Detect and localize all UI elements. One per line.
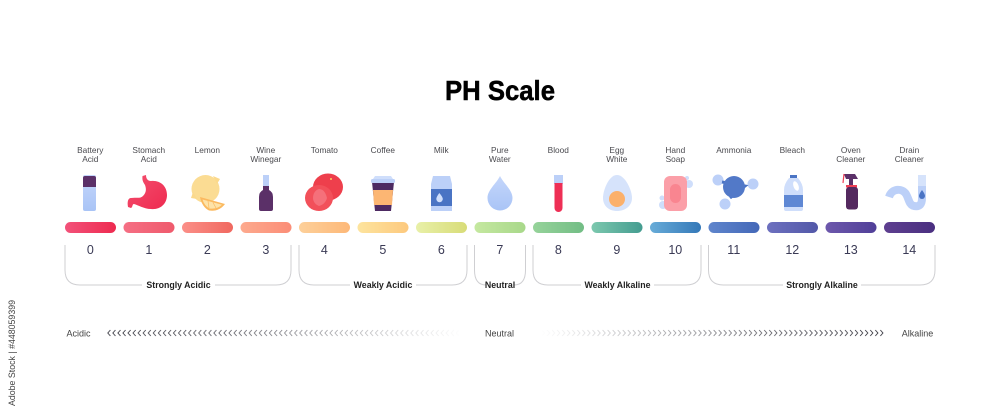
icon: water drop [488, 176, 512, 210]
substance labels: Milk [434, 145, 450, 155]
bracket: weakly acidic: Weakly Acidic [354, 280, 412, 290]
icon: hand soap [659, 176, 693, 211]
arrow: towards acidic [107, 330, 448, 336]
pH numbers: 7 [496, 243, 503, 257]
substance labels: Pure [491, 145, 509, 155]
bracket: neutral [474, 245, 526, 290]
bracket: strongly acidic: Strongly Acidic [146, 280, 211, 290]
substance labels: Ammonia [716, 145, 752, 155]
substance labels: Stomach [132, 145, 166, 155]
pH numbers: 2 [204, 243, 211, 257]
pH numbers: 5 [379, 243, 386, 257]
substance labels: Blood [548, 145, 569, 155]
substance labels [77, 145, 924, 164]
pH numbers: 11 [727, 243, 740, 257]
icon: egg [603, 175, 632, 211]
pH numbers [87, 243, 916, 257]
stock image credit: Adobe Stock | #448059399 [7, 300, 17, 406]
substance labels: Drain [899, 145, 920, 155]
bracket: weakly acidic [299, 245, 467, 290]
pH numbers: 3 [262, 243, 269, 257]
pH numbers: 0 [87, 243, 94, 257]
pH numbers: 6 [438, 243, 445, 257]
pH numbers: 9 [613, 243, 620, 257]
icon: stomach [128, 175, 167, 209]
icon: bleach bottle [784, 175, 803, 211]
pH numbers: 4 [321, 243, 328, 257]
pH numbers: 12 [785, 243, 799, 257]
icon: tomato [305, 174, 343, 211]
substance labels: Bleach [780, 145, 805, 155]
title: PH Scale [445, 75, 555, 106]
icon: milk carton [431, 176, 452, 211]
icon: lemon [191, 175, 225, 211]
bracket: weakly alkaline [533, 245, 701, 290]
substance labels: Acid [82, 154, 99, 164]
substance labels: Battery [77, 145, 104, 155]
icon: ammonia molecule [712, 174, 758, 210]
icon: oven cleaner spray [843, 174, 858, 210]
substance labels: Acid [141, 154, 157, 164]
neutral label: Neutral [485, 328, 514, 338]
substance labels: White [606, 154, 628, 164]
substance labels: Egg [609, 145, 625, 155]
bracket: strongly alkaline [708, 245, 935, 290]
bracket: strongly acidic [65, 245, 291, 290]
substance labels: Tomato [311, 145, 338, 155]
bracket: weakly alkaline: Weakly Alkaline [584, 280, 651, 290]
substance labels: Water [489, 154, 511, 164]
pH numbers: 10 [668, 243, 682, 257]
substance labels: Winegar [250, 154, 281, 164]
arrow: towards alkaline [552, 330, 884, 336]
pH numbers: 13 [844, 243, 858, 257]
icon: wine bottle [259, 175, 273, 211]
substance labels: Hand [665, 145, 686, 155]
alkaline label: Alkaline [902, 328, 933, 338]
substance labels: Coffee [371, 145, 395, 155]
substance labels: Cleaner [836, 154, 866, 164]
substance labels: Cleaner [895, 154, 924, 164]
pH numbers: 1 [145, 243, 152, 257]
colour scale bars [65, 222, 935, 233]
acidic label: Acidic [66, 328, 91, 338]
substance labels: Wine [256, 145, 276, 155]
substance labels: Lemon [195, 145, 220, 155]
icon: coffee cup [371, 176, 395, 211]
pH numbers: 8 [555, 243, 562, 257]
icon: blood test tube [554, 175, 563, 212]
substance labels: Oven [841, 145, 861, 155]
bracket: neutral: Neutral [485, 280, 515, 290]
icon: drain pipe [889, 175, 926, 206]
bracket: strongly alkaline: Strongly Alkaline [786, 280, 858, 290]
substance labels: Soap [666, 154, 685, 164]
icon: battery [83, 175, 96, 211]
pH numbers: 14 [902, 243, 916, 257]
